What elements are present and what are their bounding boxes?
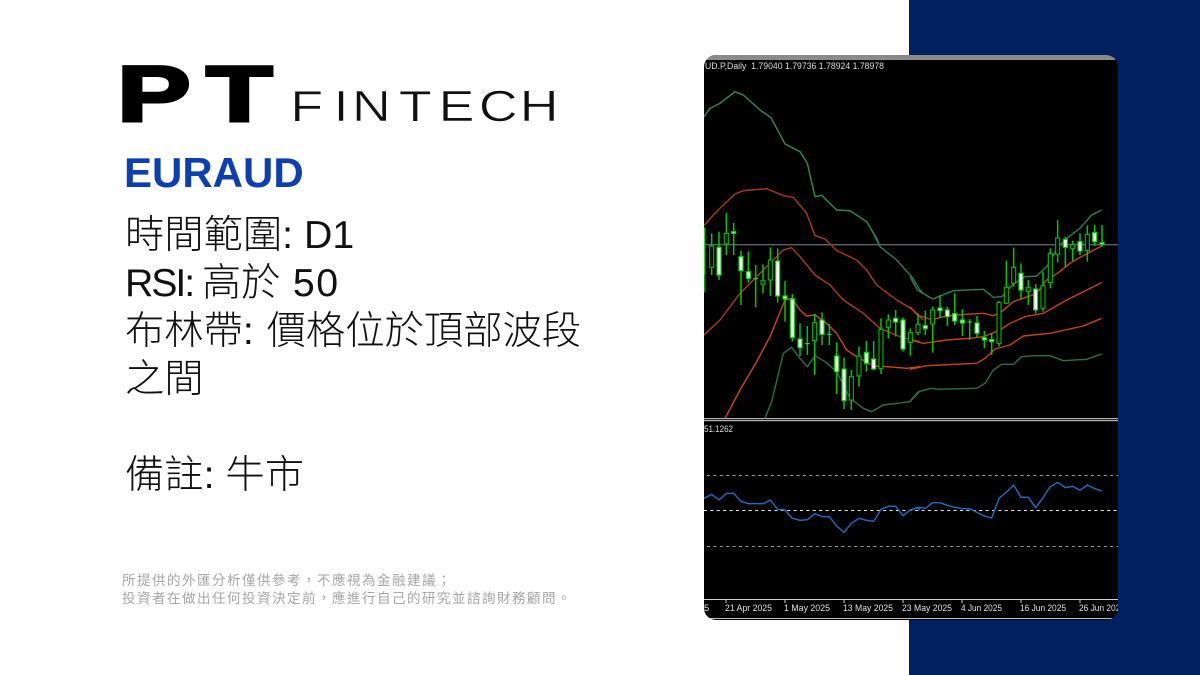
bollinger bands upper part <box>704 92 1102 418</box>
time axis: 26 Jun 2025 <box>1079 603 1125 614</box>
details text block: RSI: 高於 50 <box>125 261 340 305</box>
time axis: 4 Jun 2025 <box>961 603 1002 614</box>
details text block: 時間範圍: D1 <box>125 213 354 257</box>
time axis: 13 May 2025 <box>843 603 893 614</box>
RSI value label: 51.1262 <box>704 424 733 435</box>
logo: PT FINTECH <box>117 50 558 135</box>
trading chart <box>704 55 1118 620</box>
RSI level lines <box>704 476 1118 546</box>
time axis: 1 May 2025 <box>784 603 830 614</box>
details text block: 之間 <box>125 357 204 401</box>
time axis: 16 Jun 2025 <box>1020 603 1066 614</box>
details text block <box>125 213 581 497</box>
disclaimer: 所提供的外匯分析僅供參考，不應視為金融建議； <box>122 573 452 588</box>
logo: PT FINTECH: FINTECH <box>290 82 558 131</box>
heading: EURAUD: EURAUD <box>124 149 304 196</box>
details text block: 布林帶: 價格位於頂部波段 <box>125 309 581 353</box>
disclaimer: 投資者在做出任何投資決定前，應進行自己的研究並諮詢財務顧問。 <box>122 591 572 606</box>
time axis: 23 May 2025 <box>902 603 952 614</box>
disclaimer <box>122 573 572 606</box>
details text block: 備註: 牛市 <box>125 453 304 497</box>
time axis <box>704 599 1125 614</box>
time axis: 21 Apr 2025 <box>725 603 772 614</box>
chart title readout: UD.P,Daily 1.79040 1.79736 1.78924 1.78978 <box>705 61 884 72</box>
navy side panel <box>909 0 1200 675</box>
RSI line <box>704 482 1102 532</box>
candlesticks left section <box>701 213 912 410</box>
candlesticks right section <box>916 220 1104 355</box>
time axis: 5 <box>704 603 709 614</box>
